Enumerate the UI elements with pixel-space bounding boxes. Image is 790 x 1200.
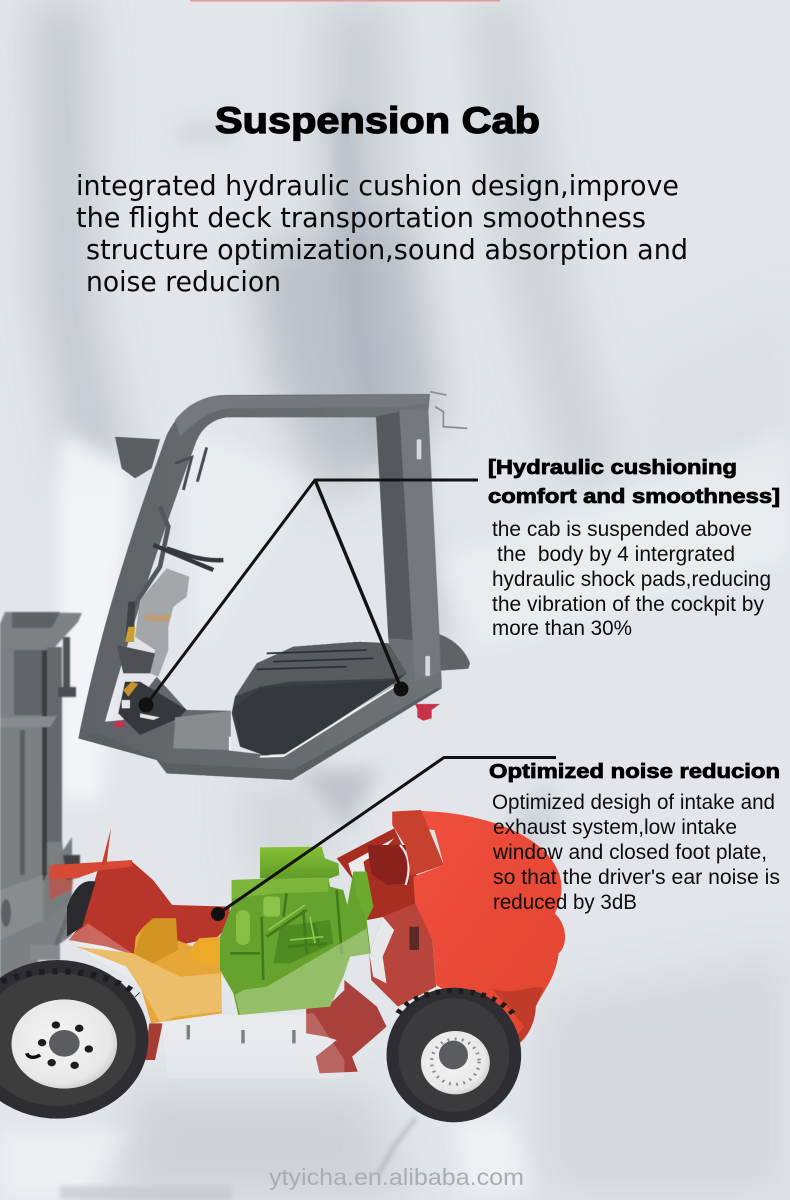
front red hood [69,862,230,955]
intro paragraph: structure optimization,sound absorption and [86,233,688,266]
translucent side panel [161,1013,344,1078]
dash panel [135,568,189,677]
streak [378,1118,416,1175]
callout: noise reduction: Optimized noise reducion [489,761,780,783]
callout: noise reduction: reduced by 3dB [493,891,637,914]
front tyre [0,960,148,1119]
rear mount bolt [415,704,440,721]
front rim [11,999,117,1089]
white gap line [260,686,395,757]
dash shelf [117,645,155,673]
oil cap [263,897,280,917]
callout: noise reduction [489,761,780,914]
pillar highlight [399,410,440,682]
roof latch [430,392,467,428]
steering column [132,507,168,610]
wiper and mirror [175,447,207,490]
front shield [69,923,222,1023]
rear mechanism [369,903,436,1007]
top ridge [232,877,328,898]
intro paragraph: integrated hydraulic cushion design,improve [76,169,679,202]
callout: hydraulic cushioning: the vibration of the cockpit by [492,593,764,616]
front hub [49,1030,80,1057]
illustration: green engine [220,847,373,1015]
callout: noise reduction: window and closed foot plate, [492,841,767,864]
leader line: noise reduction [211,758,556,921]
illustration: forklift mast [0,612,82,990]
intro paragraph: the flight deck transportation smoothness [76,201,646,234]
lower bracket [306,980,386,1073]
pillar slots [417,439,421,459]
floor plate [173,711,231,750]
lower frame shade [78,688,442,780]
engine block [220,872,373,1015]
counterweight shade [492,987,543,1053]
counterweight [392,811,565,1053]
upper hatch [392,810,444,876]
watermark: ytyicha.en.alibaba.com [269,1164,524,1190]
right pillar inner face [376,412,413,640]
front wheel arch shadow [67,881,96,937]
mount pins [188,1025,294,1043]
leader lines: hydraulic cushioning [138,480,478,712]
rear wing platform [437,633,470,671]
yellow lever [125,602,135,642]
rear hub [439,1041,468,1069]
top beam highlight [175,395,428,437]
pedals [118,682,187,735]
panel handle [142,615,172,622]
translucent shield over sump [235,928,370,1015]
callout: hydraulic cushioning: the cab is suspended above [492,518,752,541]
filter cylinder [236,910,250,945]
pulley [353,872,373,920]
orange transmission [77,918,222,1023]
shaded middle [273,920,333,963]
floor seam [226,737,233,751]
illustration: red chassis and wheels [0,810,565,1122]
callout: noise reduction: so that the driver's ear noise is [493,866,780,889]
rear frame [337,828,419,920]
cab frame [78,394,442,780]
intro paragraph: noise reducion [86,265,281,298]
faint lower-left smudge [60,1186,232,1200]
callout: hydraulic cushioning: the body by 4 intergrated [497,543,735,566]
front lower strut [145,1023,163,1060]
illustration: suspended cab frame [78,392,470,780]
seat [232,642,407,755]
rear tyre [386,988,521,1122]
callout: hydraulic cushioning [488,457,780,640]
callout: hydraulic cushioning: comfort and smoothness] [488,486,780,508]
intro paragraph [76,169,688,298]
callout: noise reduction: Optimized desigh of intake and [492,791,775,814]
front lug holes [42,1025,89,1065]
callout: hydraulic cushioning: hydraulic shock pads,reducing [492,568,771,591]
pipework [230,890,342,980]
callout: hydraulic cushioning: more than 30% [492,617,632,640]
title: Suspension Cab [215,100,540,141]
front visor [115,437,160,478]
steering wheel [153,545,223,570]
callout: noise reduction: exhaust system,low intake [493,816,737,839]
callout: hydraulic cushioning: [Hydraulic cushioning [488,457,737,479]
valve cover [260,847,339,880]
rear rim [421,1031,490,1094]
